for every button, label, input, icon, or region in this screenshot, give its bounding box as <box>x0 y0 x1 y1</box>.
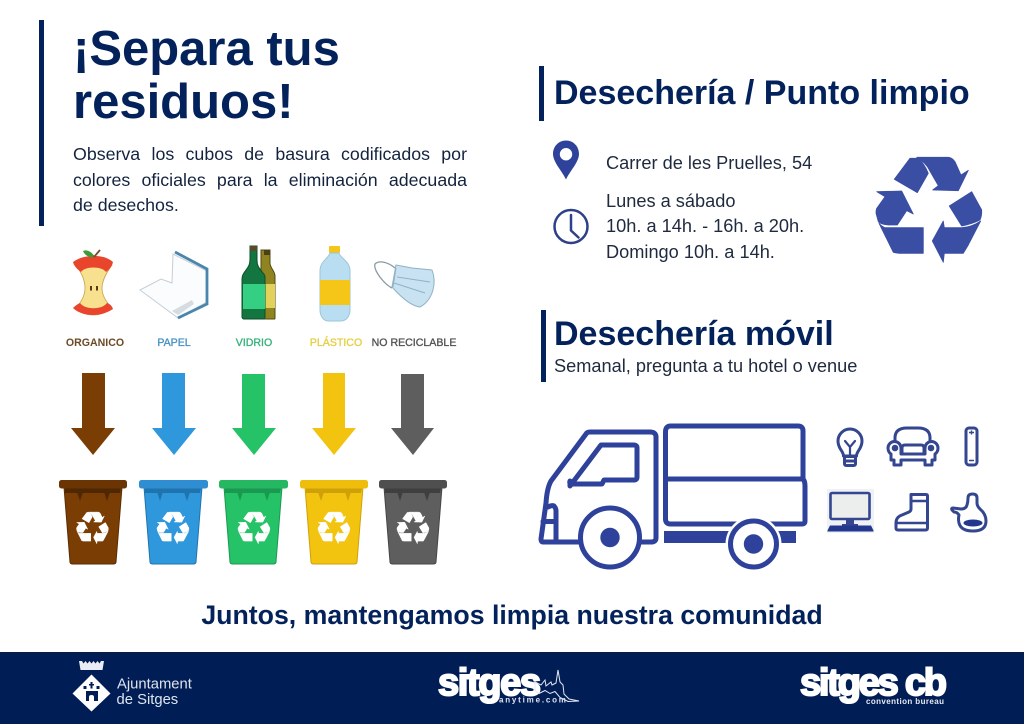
logo: Ajuntament de Sitges: Ajuntament <box>117 676 192 692</box>
opening hours: Domingo 10h. a 14h. <box>606 242 775 262</box>
label: papel: PAPEL <box>157 337 191 349</box>
icon: apple core <box>73 250 113 315</box>
title <box>73 22 340 129</box>
arrow: yellow <box>312 373 356 455</box>
label: organico: ORGANICO <box>66 337 124 349</box>
title: residuos! <box>73 75 294 129</box>
intro text: Observa los cubos de basura codificados por <box>73 144 467 164</box>
opening hours: Lunes a sábado <box>606 190 735 210</box>
arrow: grey <box>391 374 434 455</box>
logo: sitges anytime: anytime.com <box>499 696 568 704</box>
icon: paper <box>140 252 207 318</box>
icon: glass bottles <box>242 246 275 319</box>
logo: Ajuntament de Sitges <box>72 661 192 712</box>
icon: truck <box>541 426 805 572</box>
opening hours <box>606 190 804 262</box>
intro text <box>73 144 467 215</box>
logo: sitges cb: sitges cb <box>800 662 947 704</box>
label: plastico: PLÁSTICO <box>310 336 362 349</box>
bin: blue <box>139 480 208 564</box>
title: ¡Separa tus <box>73 22 340 76</box>
bin: yellow <box>300 480 368 564</box>
label: vidrio: VIDRIO <box>236 337 272 349</box>
bin: green <box>219 480 288 564</box>
opening hours: 10h. a 14h. - 16h. a 20h. <box>606 216 804 236</box>
icon: face mask <box>375 262 434 307</box>
heading: punto limpio: Desechería / Punto limpio <box>554 74 970 112</box>
icon: recycling symbol <box>876 157 982 262</box>
logo: Ajuntament de Sitges: de Sitges <box>116 692 178 708</box>
intro text: de desechos. <box>73 195 179 215</box>
logo: sitges cb: convention bureau <box>866 697 944 706</box>
label: no reciclable: NO RECICLABLE <box>372 337 456 349</box>
bin: grey <box>379 480 447 564</box>
icon: plastic bottle <box>320 246 350 321</box>
arrow: blue <box>152 373 196 455</box>
address: Carrer de les Pruelles, 54 <box>606 153 812 173</box>
bin: brown <box>59 480 127 564</box>
section bar: punto limpio <box>539 66 544 121</box>
title accent bar <box>39 20 44 226</box>
icon: flask <box>952 494 986 531</box>
logo: sitges anytime: sitges <box>438 662 541 704</box>
footer band <box>0 652 1024 724</box>
closing slogan: Juntos, mantengamos limpia nuestra comunidad <box>201 600 823 630</box>
icon: armchair <box>888 428 938 465</box>
heading: desecheria movil: Desechería móvil <box>554 315 834 353</box>
subheading: movil: Semanal, pregunta a tu hotel o venue <box>554 356 857 376</box>
icon: battery <box>966 428 977 465</box>
icon: light bulb <box>838 429 862 466</box>
intro text: colores oficiales para la eliminación adecuada <box>73 170 467 190</box>
icon: location pin <box>553 140 579 180</box>
section bar: movil <box>541 310 546 382</box>
arrow: brown <box>71 373 115 455</box>
icon: clock <box>554 210 588 243</box>
arrow: green <box>232 374 276 455</box>
icon: boot <box>896 494 928 530</box>
icon: computer <box>827 489 874 533</box>
